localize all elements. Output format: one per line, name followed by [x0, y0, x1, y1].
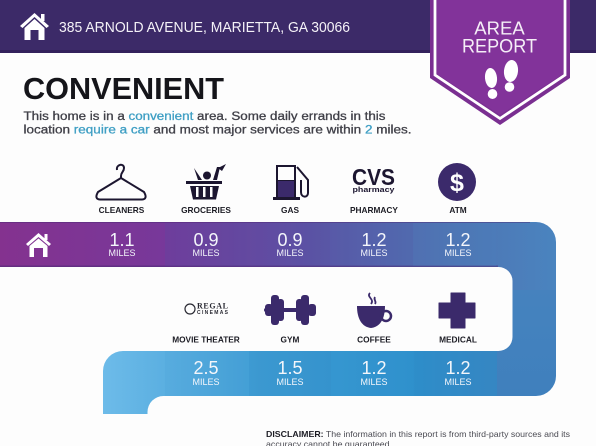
intro text: This home is in a convenient area. Some daily errands in this — [24, 111, 386, 123]
distance: movie theater — [192, 358, 220, 387]
label: coffee: COFFEE — [357, 334, 391, 344]
icon: atm dollar: $ — [450, 169, 464, 197]
badge title: REPORT — [462, 36, 537, 58]
route ribbon — [0, 222, 556, 414]
distance: movie theater: 2.5 — [193, 358, 219, 378]
label: groceries: GROCERIES — [181, 205, 231, 215]
icon: cvs pharmacy logo: pharmacy — [352, 185, 395, 194]
distance: gas: 0.9 — [277, 230, 303, 250]
distance: cleaners: 1.1 — [109, 230, 135, 250]
icon: grocery basket — [186, 164, 226, 200]
label: medical: MEDICAL — [439, 334, 477, 344]
icon: home in ribbon — [26, 233, 51, 257]
distance: groceries — [192, 230, 220, 258]
label: movie theater: MOVIE THEATER — [172, 334, 240, 344]
distances top row — [108, 230, 472, 258]
distance: cleaners: MILES — [108, 248, 136, 258]
distance: coffee — [360, 358, 388, 387]
distance: groceries: MILES — [192, 248, 220, 258]
icon: gas pump — [273, 165, 308, 200]
intro text — [24, 111, 412, 136]
distances bottom row — [192, 358, 472, 387]
badge: area report — [430, 0, 570, 125]
labels top row — [99, 205, 467, 215]
heading: CONVENIENT — [23, 72, 224, 106]
icon: cvs pharmacy logo: CVS — [352, 164, 395, 190]
labels bottom row — [172, 334, 477, 344]
disclaimer — [266, 429, 570, 446]
distance: medical — [444, 358, 472, 387]
icon: regal cinemas logo: REGAL — [197, 302, 228, 310]
icon: regal cinemas logo — [185, 302, 229, 316]
distance: atm: MILES — [444, 248, 472, 258]
distance: atm: 1.2 — [445, 230, 471, 250]
badge title: AREA — [474, 18, 525, 38]
disclaimer: DISCLAIMER: The information in this report is from third-party sources and its — [266, 429, 570, 439]
label: gym: GYM — [281, 334, 300, 344]
icon: home in header — [20, 13, 49, 40]
distance: medical: MILES — [444, 377, 472, 387]
distance: movie theater: MILES — [192, 377, 220, 387]
icon: atm dollar — [438, 163, 476, 201]
distance: medical: 1.2 — [445, 358, 471, 378]
icon: dumbbell — [264, 295, 316, 325]
distance: gym — [276, 358, 304, 387]
badge title — [462, 18, 537, 58]
distance: coffee: MILES — [360, 377, 388, 387]
header band — [0, 0, 596, 53]
label: pharmacy: PHARMACY — [350, 205, 398, 215]
icon: coffee cup — [357, 293, 391, 328]
address: 385 ARNOLD AVENUE, MARIETTA, GA 30066 — [59, 20, 350, 36]
label: cleaners: CLEANERS — [99, 205, 145, 215]
icon: regal cinemas logo: CINEMAS — [197, 310, 229, 316]
distance: gym: 1.5 — [277, 358, 303, 378]
intro text: location require a car and most major services are within 2 miles. — [24, 124, 412, 136]
distance: pharmacy: 1.2 — [361, 230, 387, 250]
distance: pharmacy — [360, 230, 388, 258]
distance: atm — [444, 230, 472, 258]
distance: coffee: 1.2 — [361, 358, 387, 378]
label: gas: GAS — [281, 205, 299, 215]
distance: gym: MILES — [276, 377, 304, 387]
distance: pharmacy: MILES — [360, 248, 388, 258]
distance: cleaners — [108, 230, 136, 258]
icon: footprints — [484, 59, 519, 99]
icon: hanger — [96, 165, 146, 200]
label: atm: ATM — [449, 205, 467, 215]
icon: medical cross — [439, 293, 475, 328]
distance: gas: MILES — [276, 248, 304, 258]
distance: gas — [276, 230, 304, 258]
distance: groceries: 0.9 — [193, 230, 219, 250]
